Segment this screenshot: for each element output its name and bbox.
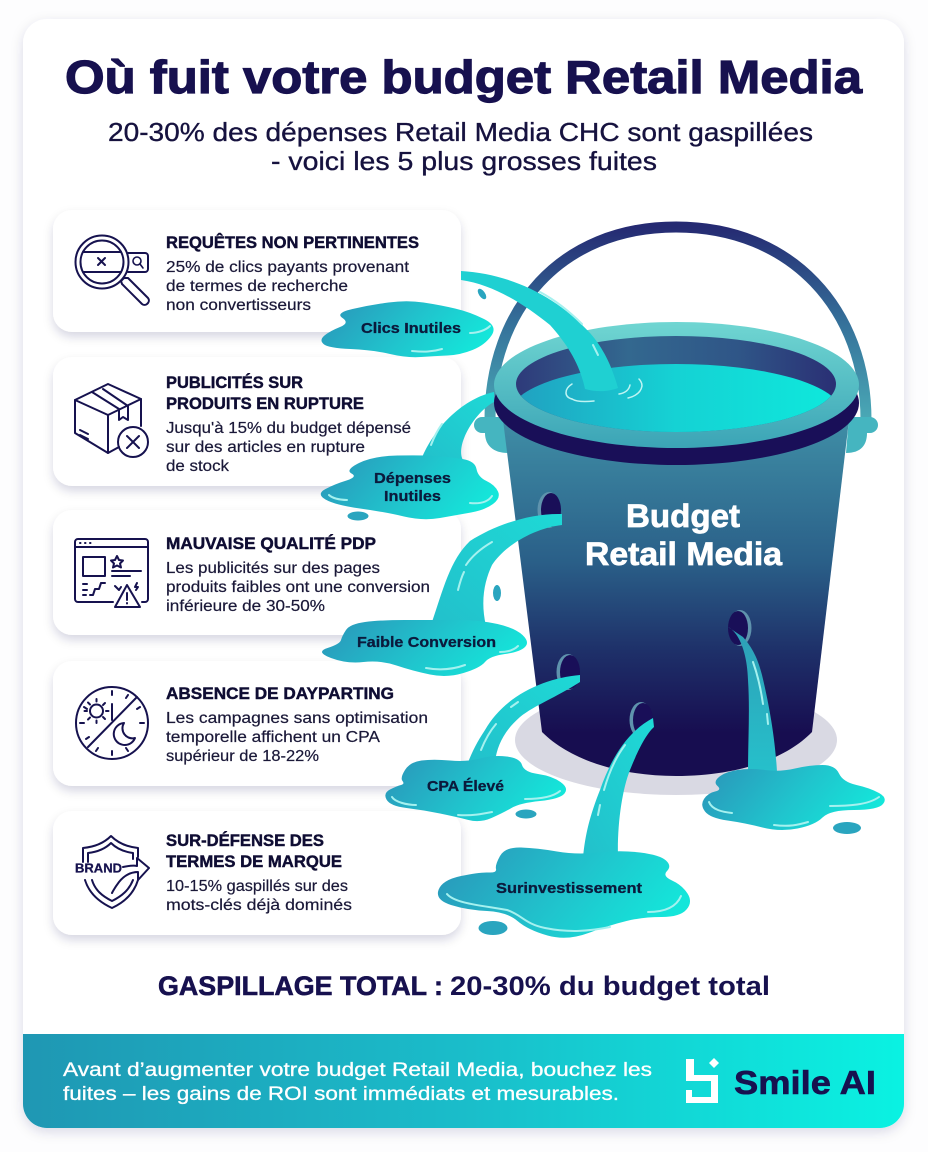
total waste statement [158,971,770,1001]
icon: brand shield [75,836,149,908]
footer message [63,1059,652,1105]
puddle [321,301,494,357]
holes [538,492,752,738]
description [166,259,410,314]
leak 1: clics inutiles [321,271,618,391]
label: CPA Élevé [427,778,504,795]
panel: publicités sur produits en rupture [53,357,461,486]
description [166,710,428,765]
heading: PUBLICITÉS SUR [166,373,303,392]
bucket shadow on ground [515,685,837,795]
label: Dépenses [374,470,451,487]
description: Les campagnes sans optimisation [166,710,428,727]
description: temporelle affichent un CPA [166,729,381,746]
bucket body [503,420,849,776]
leak 6: right stream and puddle [702,627,885,834]
label: Surinvestissement [496,880,642,897]
heading [166,373,364,413]
description: sur des articles en rupture [166,439,365,456]
icon: day and night clock [76,687,148,759]
stream [461,271,618,391]
footer message: Avant d’augmenter votre budget Retail Media, bouchez les [63,1059,652,1081]
description: Jusqu'à 15% du budget dépensé [166,420,411,437]
droplet [493,585,501,601]
water surface [521,364,831,432]
description: inférieure de 30-50% [166,598,325,615]
panel: mauvaise qualité PDP [53,510,461,635]
description: produits faibles ont une conversion [166,579,430,596]
description: Les publicités sur des pages [166,560,380,577]
description [166,878,352,914]
bucket label: Budget [626,498,740,534]
droplet [833,822,861,834]
panel: sur-défense des termes de marque [53,811,461,935]
description: supérieur de 18-22% [166,748,319,765]
stream [421,392,494,460]
stream [583,718,654,858]
heading: TERMES DE MARQUE [166,852,342,871]
puddle [438,847,690,938]
label [374,470,451,505]
stream [728,627,777,772]
subtitle: - voici les 5 plus grosses fuites [271,146,657,176]
footer message: fuites – les gains de ROI sont immédiats et mesurables. [63,1083,619,1105]
leak 2: dépenses inutiles [321,392,499,520]
description: de termes de recherche [166,278,348,295]
label: Inutiles [384,488,441,505]
puddle [702,765,885,830]
ripples [566,379,642,402]
heading: SUR-DÉFENSE DES [166,831,324,850]
heading: ABSENCE DE DAYPARTING [166,684,394,703]
title: Où fuit votre budget Retail Media [65,51,862,103]
puddle [321,455,499,519]
icon: product page with warning [75,539,148,607]
heading: PRODUITS EN RUPTURE [166,394,364,413]
label: Faible Conversion [357,634,496,651]
description: de stock [166,458,229,475]
stream [467,675,580,765]
droplet [476,287,488,301]
droplet [348,512,368,520]
logo mark [686,1058,719,1103]
total waste statement: GASPILLAGE TOTAL : [158,971,443,1001]
heading: MAUVAISE QUALITÉ PDP [166,534,376,553]
subtitle: 20-30% des dépenses Retail Media CHC sont gaspillées [108,117,813,147]
inner wall [516,336,836,432]
logo wordmark: Smile AI [734,1064,876,1101]
label: Clics Inutiles [361,320,461,337]
total waste statement: 20-30% du budget total [450,971,770,1001]
bucket [474,227,878,776]
icon: brand shield: BRAND [75,860,122,876]
icon: box with cross [75,384,148,457]
dark rim band [494,341,859,465]
description: mots-clés déjà dominés [166,897,352,914]
puddle [385,756,566,821]
leak 4: CPA élevé [385,675,580,821]
icon: magnifying glass [76,236,149,305]
description [166,560,430,615]
panel: absence de dayparting [53,661,461,786]
bucket label [585,498,782,572]
droplet [478,921,508,935]
puddle [322,620,527,676]
description: 25% de clics payants provenant [166,259,410,276]
rim [494,322,859,448]
leak 5: surinvestissement [438,718,690,938]
bucket label: Retail Media [585,536,782,572]
subtitle [108,117,813,176]
bucket handle [490,227,866,420]
stream [432,514,562,626]
heading: REQUÊTES NON PERTINENTES [166,233,419,252]
bucket ears [474,417,878,453]
description [166,420,411,475]
leak 3: faible conversion [322,514,562,676]
footer band [23,1034,904,1128]
description: 10-15% gaspillés sur des [166,878,348,895]
heading [166,831,342,871]
panel: requêtes non pertinentes [53,210,461,332]
description: non convertisseurs [166,297,311,314]
droplet [516,810,536,818]
